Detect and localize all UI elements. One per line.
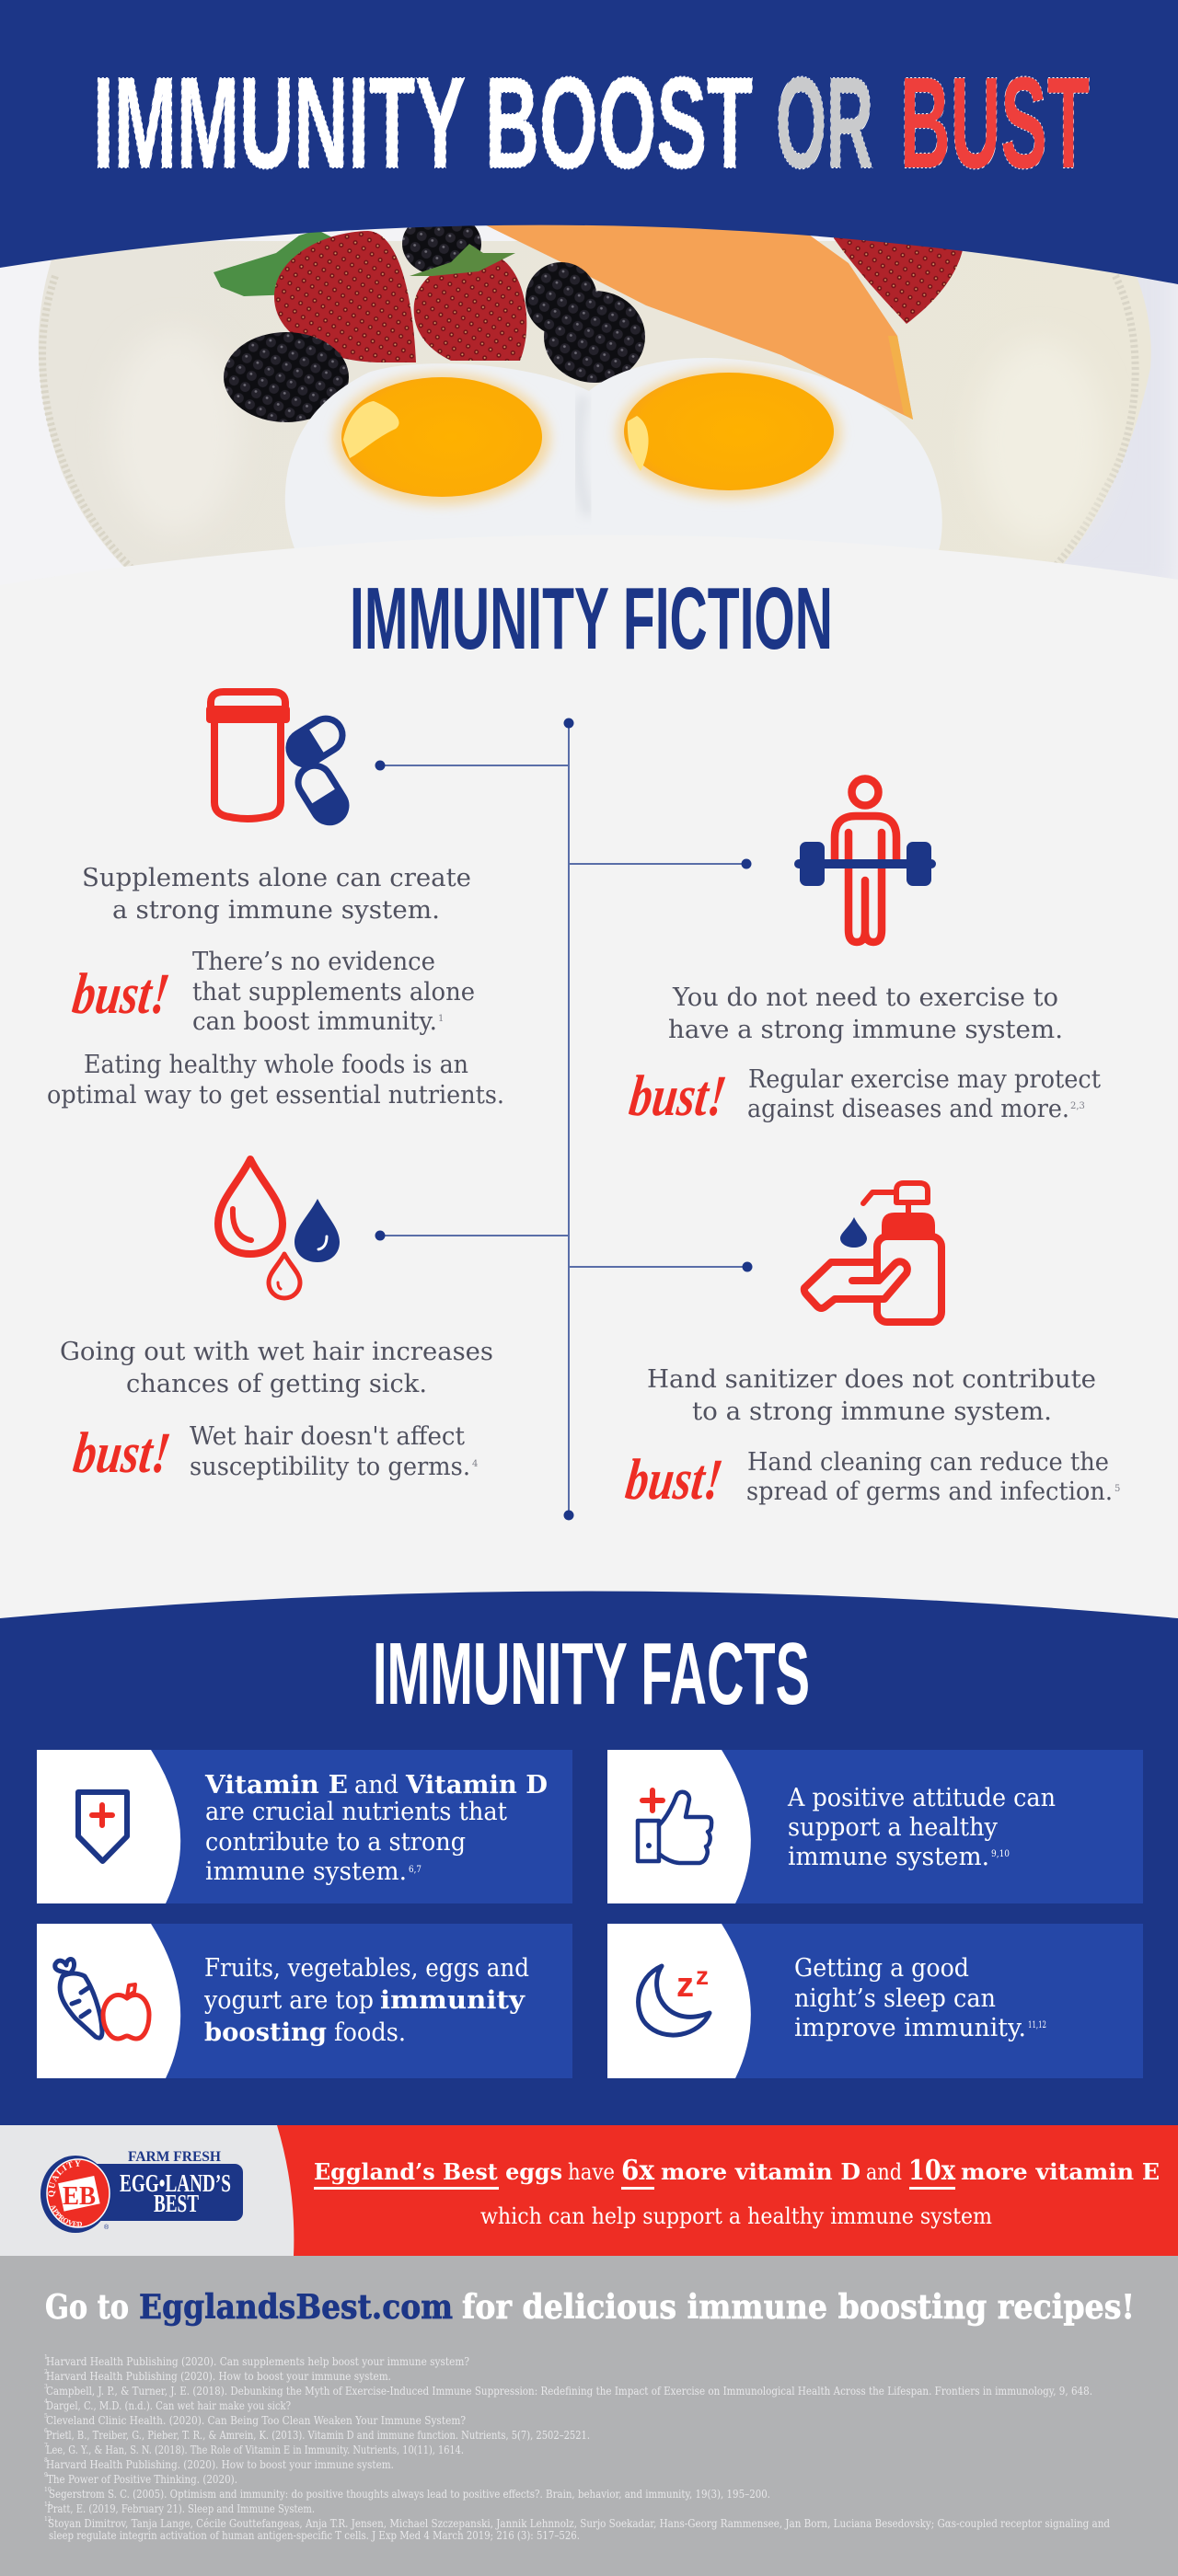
- fiction 1 answer: There’s no evidence: [192, 948, 435, 976]
- icon: moon and z's: [639, 1961, 710, 2035]
- bust label 1: bust!: [69, 961, 173, 1026]
- hero photo: eggs and fruit on a plate: [0, 212, 1178, 598]
- fiction 3 answer: Wet hair doesn't affect: [190, 1422, 465, 1451]
- references: Pratt, E. (2019, February 21). Sleep and Immune System.: [47, 2502, 315, 2515]
- left yolk: [341, 377, 542, 497]
- promo text: have: [568, 2159, 615, 2185]
- call to action: Go to: [45, 2288, 129, 2327]
- foods text: Fruits, vegetables, eggs and: [204, 1954, 529, 1983]
- logo: Eggland's Best: EGG•LAND’S: [120, 2169, 231, 2197]
- icon: supplement bottle and pills: [206, 692, 356, 833]
- fiction 2 claim: You do not need to exercise to: [672, 983, 1058, 1012]
- promo text: 10x: [908, 2155, 956, 2187]
- bust label 4: bust!: [622, 1447, 726, 1512]
- fiction 1 claim: a strong immune system.: [112, 896, 440, 925]
- fiction 4 answer: spread of germs and infection.: [746, 1478, 1113, 1506]
- leaves: [214, 230, 354, 296]
- fiction 3 claim: [60, 1338, 493, 1398]
- right yolk: [624, 373, 834, 490]
- fiction 3 answer: susceptibility to germs.: [190, 1453, 470, 1481]
- references: 9: [44, 2472, 48, 2478]
- icon: thumbs up: [638, 1790, 711, 1863]
- vitamins text: [204, 1771, 548, 1886]
- references: The Power of Positive Thinking. (2020).: [47, 2473, 237, 2486]
- fiction 4 answer: Hand cleaning can reduce the: [747, 1448, 1109, 1477]
- promo text: which can help support a healthy immune system: [480, 2203, 992, 2229]
- references: 3: [44, 2384, 48, 2390]
- promo text: more vitamin D: [661, 2158, 860, 2185]
- references: Dargel, C., M.D. (n.d.). Can wet hair make you sick?: [46, 2399, 291, 2412]
- logo: Eggland's Best: ®: [104, 2224, 110, 2231]
- promo text: [314, 2155, 1160, 2229]
- sleep text: improve immunity.: [794, 2014, 1026, 2042]
- call to action: [45, 2288, 1135, 2327]
- melon slice: [477, 221, 913, 420]
- left strawberry: [274, 231, 416, 362]
- fiction 1 answer: [47, 948, 504, 1110]
- fiction 4 claim: [647, 1365, 1096, 1426]
- fiction 2 answer: 2,3: [1070, 1101, 1085, 1111]
- card: vitamins: [37, 1750, 572, 1903]
- promo text: and: [866, 2159, 902, 2185]
- references: 7: [44, 2443, 48, 2449]
- fiction 2 answer: Regular exercise may protect: [748, 1065, 1101, 1094]
- header band: [0, 0, 1178, 284]
- card: attitude: [607, 1750, 1143, 1903]
- vitamins text: Vitamin E: [204, 1771, 348, 1800]
- fiction 3 answer: 4: [472, 1459, 478, 1469]
- fiction 3 claim: chances of getting sick.: [126, 1370, 427, 1398]
- references: 11: [44, 2501, 52, 2508]
- logo: Eggland's Best: FARM FRESH: [128, 2149, 222, 2165]
- fiction 1 answer: Eating healthy whole foods is an: [84, 1051, 468, 1079]
- references: sleep regulate integrin activation of human antigen-specific T cells. J Exp Med 4 March 2019; 216 (3): 517–526.: [49, 2529, 580, 2542]
- foods text: foods.: [334, 2018, 406, 2047]
- references: 1: [44, 2354, 48, 2361]
- references: Prietl, B., Treiber, G., Pieber, T. R., & Amrein, K. (2013). Vitamin D and immune function. Nutrients, 5(7), 2502–2521.: [46, 2429, 590, 2442]
- sleep text: [794, 1954, 1046, 2042]
- heading: immunity facts: IMMUNITY FACTS: [373, 1625, 810, 1723]
- card: foods: [37, 1924, 572, 2078]
- references: Harvard Health Publishing (2020). How to boost your immune system.: [46, 2370, 391, 2383]
- references: Lee, G. Y., & Han, S. N. (2018). The Role of Vitamin E in Immunity. Nutrients, 10(11), 1614.: [46, 2444, 464, 2456]
- attitude text: 9,10: [991, 1849, 1010, 1859]
- references: Segerstrom S. C. (2005). Optimism and immunity: do positive thoughts always lead to positive effects?. Brain, behavior, and immunity, 19(3), 195–200.: [49, 2488, 770, 2501]
- attitude text: A positive attitude can: [787, 1784, 1056, 1812]
- fiction 1 answer: that supplements alone: [192, 978, 475, 1006]
- references: 5: [44, 2413, 48, 2420]
- sleep text: 11,12: [1028, 2020, 1046, 2030]
- references: [44, 2354, 1110, 2542]
- fiction 1 answer: can boost immunity.: [192, 1007, 437, 1036]
- vitamins text: Vitamin D: [405, 1771, 548, 1800]
- foods text: yogurt are top: [203, 1986, 374, 2015]
- fiction 2 claim: [668, 983, 1063, 1044]
- vitamins text: are crucial nutrients that: [205, 1798, 507, 1826]
- logo: Eggland's Best: QUALITY: [48, 2160, 81, 2197]
- vitamins text: contribute to a strong: [205, 1828, 466, 1857]
- logo: Eggland's Best: APPROVED: [50, 2206, 82, 2226]
- centre strawberry: [414, 256, 526, 361]
- footer background: [0, 2256, 1178, 2576]
- call to action: for delicious immune boosting recipes!: [462, 2288, 1135, 2327]
- fiction 4 claim: to a strong immune system.: [692, 1397, 1052, 1426]
- references: 12: [44, 2516, 52, 2523]
- foods text: immunity: [380, 1986, 525, 2015]
- left blackberry: [224, 332, 349, 422]
- attitude text: support a healthy: [788, 1813, 999, 1842]
- icon: moon and z's: z: [696, 1961, 709, 1990]
- vitamins text: 6,7: [409, 1865, 422, 1875]
- references: 10: [44, 2487, 52, 2493]
- top blackberry: [402, 212, 481, 276]
- icon: shield: [78, 1792, 127, 1861]
- fiction 1 claim: Supplements alone can create: [82, 864, 471, 892]
- plate: [39, 241, 1151, 589]
- call to action: EgglandsBest.com: [139, 2288, 453, 2327]
- references: Harvard Health Publishing. (2020). How to boost your immune system.: [46, 2458, 394, 2471]
- vitamins text: immune system.: [205, 1857, 407, 1886]
- logo: Eggland's Best: EB: [63, 2181, 96, 2211]
- foods text: [203, 1954, 529, 2047]
- logo: Eggland's Best: [40, 2149, 243, 2233]
- references: Harvard Health Publishing (2020). Can supplements help boost your immune system?: [46, 2355, 469, 2368]
- icon: moon and z's: z: [676, 1966, 694, 2005]
- bust label 3: bust!: [70, 1420, 174, 1485]
- references: 4: [44, 2398, 48, 2405]
- back right strawberry: [834, 221, 965, 324]
- sleep text: Getting a good: [794, 1954, 969, 1983]
- right blackberries: [525, 262, 597, 336]
- promo text: more vitamin E: [961, 2158, 1160, 2185]
- fiction 3 answer: [190, 1422, 478, 1481]
- foods text: boosting: [204, 2018, 327, 2047]
- logo band: [0, 2125, 294, 2256]
- promo text: 6x: [621, 2155, 655, 2187]
- logo: Eggland's Best: BEST: [154, 2190, 199, 2217]
- references: 6: [44, 2428, 48, 2434]
- card: sleep: [607, 1924, 1143, 2078]
- attitude text: immune system.: [788, 1843, 989, 1871]
- fiction 1 answer: 1: [438, 1014, 444, 1024]
- icon: weightlifter: [799, 778, 931, 942]
- fiction 2 answer: [747, 1065, 1101, 1123]
- icon: carrot and apple: [55, 1959, 149, 2039]
- icon: hand sanitizer: [804, 1183, 941, 1322]
- fiction 2 claim: have a strong immune system.: [668, 1016, 1063, 1044]
- bust label 2: bust!: [626, 1064, 730, 1128]
- fiction 4 answer: 5: [1114, 1484, 1120, 1494]
- sleep text: night’s sleep can: [794, 1984, 996, 2013]
- heading: immunity fiction: IMMUNITY FICTION: [350, 569, 833, 668]
- fiction 3 claim: Going out with wet hair increases: [60, 1338, 493, 1366]
- references: 8: [44, 2457, 48, 2464]
- fiction 2 answer: against diseases and more.: [747, 1095, 1069, 1123]
- references: 2: [44, 2369, 48, 2375]
- references: Cleveland Clinic Health. (2020). Can Being Too Clean Weaken Your Immune System?: [46, 2414, 466, 2427]
- attitude text: [787, 1784, 1056, 1871]
- red promo band: [277, 2125, 1178, 2256]
- vitamins text: and: [354, 1771, 398, 1800]
- promo text: Eggland’s Best eggs: [314, 2158, 562, 2185]
- title: OR: [776, 50, 873, 195]
- icon: water drops: [218, 1159, 340, 1298]
- facts section background: [0, 1592, 1178, 2125]
- fiction 4 answer: [746, 1448, 1120, 1506]
- fiction section background: [0, 535, 1178, 1638]
- fiction 1 claim: [82, 864, 471, 925]
- timeline connector: [375, 718, 753, 1520]
- fried egg whites: [285, 358, 942, 589]
- fiction 1 answer: optimal way to get essential nutrients.: [47, 1081, 504, 1110]
- fiction 4 claim: Hand sanitizer does not contribute: [647, 1365, 1096, 1394]
